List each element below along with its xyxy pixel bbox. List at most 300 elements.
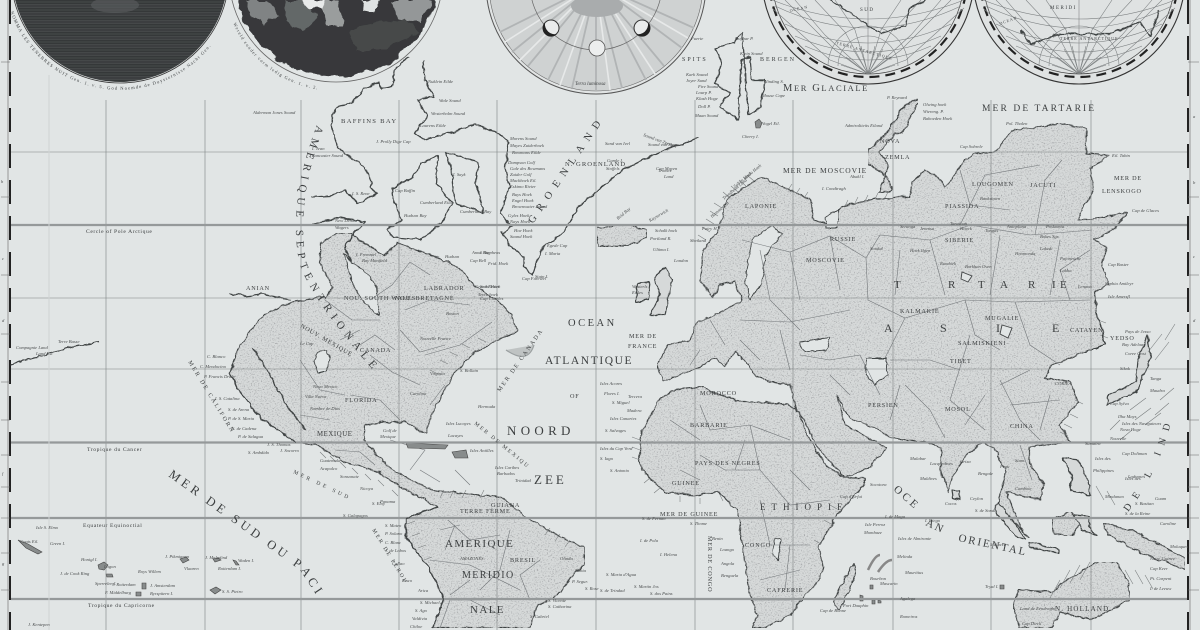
small place labels, north Atlantic and Arctic: Tromes (658, 168, 672, 173)
small place labels, north Atlantic and Arctic: Lancaster Sound (311, 153, 344, 158)
small place labels, north Atlantic and Arctic: Dampson Golf (507, 160, 536, 165)
continent and country names: CANADA (360, 347, 391, 354)
small place labels, Americas and Pacific: P. Segur. (571, 579, 588, 584)
small place labels, Americas and Pacific (16, 284, 599, 629)
small place labels, north Atlantic and Arctic: Nays Hoek (509, 219, 531, 224)
small place labels, north Atlantic and Arctic: Kark Sound (685, 72, 709, 77)
title: ocean and sea names: MER DE (629, 333, 657, 340)
title: ocean and sea names: BAFFINS BAY (341, 118, 397, 125)
title: ocean and sea names: MERIDIO (462, 570, 515, 581)
small place labels, north Atlantic and Arctic: Cap de Glaces (1132, 208, 1159, 213)
small place labels, Americas and Pacific: Roys Willem (137, 569, 162, 574)
continent and country names: CORIEA (1055, 381, 1072, 386)
small place labels, north Atlantic and Arctic: Hoeck (959, 226, 973, 231)
continent and country names: ANIAN (246, 285, 270, 292)
small place labels, Europe Asia and Africa: Bay Adelaar (1122, 342, 1145, 347)
title: ocean and sea names: MER DE CANADA (497, 331, 542, 392)
small place labels, Americas and Pacific: S. Bollain (460, 368, 479, 373)
title: ocean and sea names: NALE (470, 604, 505, 616)
title: ocean and sea names: AN (924, 517, 947, 536)
small place labels, north Atlantic and Arctic: Doll P. (697, 104, 711, 109)
continent and country names: MOSCOVIE (806, 257, 845, 264)
small place labels, Europe Asia and Africa: I. de Pola (639, 538, 659, 543)
small place labels, Europe Asia and Africa: Orixa (960, 459, 971, 464)
small place labels, north Atlantic and Arctic: Joyer Sund (686, 78, 707, 83)
right frame with degree scale (1188, 0, 1199, 630)
small place labels, Americas and Pacific: Lucayes (447, 433, 463, 438)
small place labels, Americas and Pacific: Terre Basse (58, 339, 79, 344)
left frame with degree scale: g (2, 561, 5, 566)
small place labels, north Atlantic and Arctic: Saand Hoek (510, 234, 533, 239)
small place labels, Europe Asia and Africa: Tercera (628, 394, 643, 399)
small place labels, Americas and Pacific: Le Cap (299, 341, 314, 346)
small place labels, Europe Asia and Africa: Pays de Jesso (1124, 329, 1151, 334)
small place labels, Americas and Pacific: Isle S. Elmo (35, 525, 59, 530)
small place labels, Europe Asia and Africa: Portland R. (649, 236, 671, 241)
small place labels, Europe Asia and Africa: Hammerfest (709, 200, 730, 219)
small place labels, Americas and Pacific: Isles Caribes (494, 465, 519, 470)
small place labels, north Atlantic and Arctic: Sound van Sluys (648, 142, 678, 147)
small place labels, Europe Asia and Africa: Isles Canaries (609, 416, 637, 421)
small place labels, Europe Asia and Africa: Sumatra (1085, 441, 1101, 446)
small place labels, Europe Asia and Africa: Trondheim Land (721, 177, 748, 201)
small place labels, Americas and Pacific: Nouvelle France (419, 336, 451, 341)
small place labels, north Atlantic and Arctic: Bokes Sgs (1040, 234, 1059, 239)
continent and country names: JACUTI (1030, 182, 1056, 189)
small place labels, north Atlantic and Arctic: Stoffels (606, 166, 620, 171)
continent and country names: LABRADOR (424, 285, 465, 292)
title: ocean and sea names: ORIENTAL (957, 532, 1028, 559)
small place labels, Europe Asia and Africa: Salten Hoek (732, 170, 753, 189)
small place labels, north Atlantic and Arctic: Cumberland Eilde (420, 200, 454, 205)
continent and country names: R (948, 279, 956, 291)
small place labels, Americas and Pacific: S. Ago (415, 608, 428, 613)
continent and country names: A (1000, 279, 1008, 291)
small place labels, Europe Asia and Africa: Isles Acores (599, 381, 622, 386)
continent and country names: KALMAKIE (900, 308, 939, 315)
continent and country names: SPITS (682, 57, 708, 63)
panel: west hemisphere globe: TERRE ANTARCTIQUE (836, 40, 893, 61)
small place labels, Americas and Pacific: S. de Cadena (232, 426, 257, 431)
panel: west hemisphere globe: SUD (860, 8, 875, 13)
small place labels, Europe Asia and Africa: S. Salvages (605, 428, 626, 433)
small place labels, north Atlantic and Arctic: Cumberland Bay (460, 209, 492, 214)
small place labels, Americas and Pacific: S. de Arena (228, 407, 250, 412)
title: ocean and sea names: ATLANTIQUE (545, 355, 633, 367)
small place labels, north Atlantic and Arctic: Duybar P. (734, 36, 754, 41)
title: ocean and sea names: N. HOLLAND (1055, 605, 1109, 613)
title: ocean and sea names: OCEAN (568, 318, 617, 329)
continent and country names: SALMISKIENI (958, 340, 1006, 347)
small place labels, Europe Asia and Africa: Isles du Cap Verd (599, 446, 633, 451)
small place labels, Europe Asia and Africa: Malacca (989, 542, 1007, 547)
small place labels, Europe Asia and Africa: I. Diego (924, 518, 941, 523)
small place labels, Europe Asia and Africa: Pt. Carpent (1149, 576, 1172, 581)
small place labels, Europe Asia and Africa: Mauritius (904, 570, 923, 575)
small place labels, Americas and Pacific: Bahia (575, 568, 587, 573)
continent and country names: ETHIOPIE (760, 502, 848, 512)
small place labels, north Atlantic and Arctic: Isle Amersfl (1107, 294, 1131, 299)
small place labels, north Atlantic and Arctic: Laurens Eilde (419, 123, 446, 128)
small place labels, north Atlantic and Arctic: Anna Bay (471, 250, 491, 255)
small place labels, north Atlantic and Arctic: Vinding S. (765, 79, 784, 84)
panel: east hemisphere globe: OCEAN (999, 15, 1018, 26)
small place labels, Americas and Pacific: Terra hoek (478, 292, 499, 297)
small place labels, Americas and Pacific: Callao (392, 561, 405, 566)
right frame with degree scale: a (1193, 114, 1196, 119)
small place labels, Europe Asia and Africa: Tryal I. (985, 584, 999, 589)
small place labels, Europe Asia and Africa: Mombaze (863, 530, 882, 535)
small place labels, Europe Asia and Africa: Caroline (1160, 521, 1176, 526)
small place labels, north Atlantic and Arctic: Cap Bell (470, 258, 487, 263)
small place labels, north Atlantic and Arctic: Mouse Cape (761, 93, 785, 98)
title: ocean and sea names: N. GROENLAND (565, 161, 626, 168)
small place labels, Americas and Pacific: Valdivia (412, 616, 428, 621)
continent and country names: T (894, 279, 901, 291)
small place labels, Europe Asia and Africa: Cap Doliman (1122, 451, 1148, 456)
small place labels, Europe Asia and Africa: Socotora (870, 482, 887, 487)
small place labels, Americas and Pacific: Barbados (497, 471, 515, 476)
panel: east hemisphere globe: TERRE ANTARCTIQUE (1060, 36, 1119, 41)
small place labels, Americas and Pacific: Waden I. (238, 558, 254, 563)
small place labels, north Atlantic and Arctic: I. Fremmel (355, 252, 377, 257)
panel: east hemisphere globe: MERIDI (1050, 6, 1077, 11)
continent and country names: MOROCCO (700, 390, 737, 397)
title: ocean and sea names: MER DE (1114, 175, 1142, 182)
continent and country names: RUSSIE (830, 236, 856, 243)
small place labels, north Atlantic and Arctic: Mayes Zuiderhoek (509, 143, 545, 148)
small place labels, Europe Asia and Africa: Vardo Hoek (742, 162, 763, 181)
continent and country names: LAPONIE (745, 203, 777, 210)
small place labels, Americas and Pacific: Compagnie Land (16, 345, 48, 350)
small place labels, Europe Asia and Africa: Angola (720, 561, 735, 566)
small place labels, north Atlantic and Arctic: J. Prolly Dige Cap (376, 139, 411, 144)
small place labels, Europe Asia and Africa (599, 162, 1188, 626)
continent and country names: AMAZONES (459, 556, 484, 561)
small place labels, Americas and Pacific: J. Maladind (205, 555, 228, 560)
small place labels, north Atlantic and Arctic: Abakl I. (849, 174, 865, 179)
small place labels, Europe Asia and Africa: Lacquedives (929, 461, 953, 466)
small place labels, Europe Asia and Africa: Philippines (1092, 468, 1114, 473)
small place labels, Europe Asia and Africa: S. Miguel (612, 400, 630, 405)
small place labels, Americas and Pacific: Pisco (401, 578, 413, 583)
title: ocean and sea names: MER DE TARTARIE (982, 104, 1096, 114)
small place labels, north Atlantic and Arctic: Seranga (900, 224, 916, 229)
small place labels, north Atlantic and Arctic: Tarascan (950, 221, 968, 226)
small place labels, Europe Asia and Africa: Madera (626, 408, 642, 413)
small place labels, north Atlantic and Arctic: Hudson Bay (403, 213, 428, 218)
left frame with degree scale (1, 0, 10, 630)
title: ocean and sea names: Tropique du Capricorne (88, 603, 155, 609)
small place labels, Europe Asia and Africa: Romeiros (899, 614, 918, 619)
small place labels, Americas and Pacific: S. Vicente (548, 598, 566, 603)
small place labels, north Atlantic and Arctic: Cap Mayen (656, 166, 678, 171)
small place labels, north Atlantic and Arctic: Bay Manfield (362, 258, 388, 263)
small place labels, Americas and Pacific: Trinidad (515, 478, 532, 483)
continent and country names: NOVA (880, 138, 900, 145)
small place labels, north Atlantic and Arctic: Hudson (444, 254, 460, 259)
small place labels, Americas and Pacific: Coats Eil. (20, 539, 38, 544)
small place labels, Americas and Pacific: J. Pikmignon (165, 554, 190, 559)
small place labels, north Atlantic and Arctic: Land (663, 174, 674, 179)
small place labels, north Atlantic and Arctic: Brownwater Sound (512, 204, 548, 209)
title: ocean and sea names: MER DE GUINEE (660, 511, 718, 518)
title: ocean and sea names: MER GLACIALE (783, 83, 869, 94)
small place labels, Americas and Pacific: P. de Salagua (237, 434, 264, 439)
small place labels, Europe Asia and Africa: Fort Dauphin (842, 603, 869, 608)
small place labels, Europe Asia and Africa: Agalega (899, 596, 916, 601)
small place labels, Americas and Pacific: I. S. Catalina (214, 396, 240, 401)
small place labels, Europe Asia and Africa: S. Iago (600, 456, 614, 461)
title: ocean and sea names: Tropique du Cancer (87, 447, 142, 453)
small place labels, Europe Asia and Africa: Guam (1155, 496, 1167, 501)
continent and country names: S (940, 321, 947, 335)
continent and country names: TERRE FERME (460, 508, 511, 515)
small place labels, Americas and Pacific: Cap Charles (480, 296, 504, 301)
small place labels, Americas and Pacific: C. Blanc (385, 540, 401, 545)
small place labels, Europe Asia and Africa: Nouvelle (1109, 436, 1126, 441)
title: ocean and sea names: LENSKOGO (1102, 188, 1142, 195)
small place labels, Europe Asia and Africa: Sikok (1120, 366, 1131, 371)
small place labels, Americas and Pacific: J. Amsterdam (150, 583, 176, 588)
small place labels, Europe Asia and Africa: I. de Leeuw (1149, 586, 1172, 591)
small place labels, Europe Asia and Africa: Nouv. Guinee (1149, 556, 1175, 561)
small place labels, Europe Asia and Africa: Isles des (1124, 476, 1141, 481)
small place labels, Europe Asia and Africa: Maudra (1149, 388, 1166, 393)
continent and country names: NOUV. MEXIQUE (299, 323, 354, 358)
title: ocean and sea names: ZEE (534, 472, 567, 487)
continent and country names: PAYS DES NEGRES (695, 460, 761, 467)
land masses: Greenland and Spitsbergen coast (415, 32, 765, 275)
small place labels, north Atlantic and Arctic: Hoomonda (1014, 251, 1036, 256)
title: ocean and sea names: MER DE SUD (293, 470, 348, 498)
small place labels, Europe Asia and Africa: Isles des Navigateurs (1121, 421, 1162, 426)
title: ocean and sea names: MER DE CALIFORNIE (188, 360, 234, 432)
continent and country names: LOUGOMEN (972, 181, 1014, 188)
small place labels, north Atlantic and Arctic: Sound van Zeeman (643, 132, 678, 149)
small place labels, Americas and Pacific: J. de Lobos (385, 548, 406, 553)
small place labels, Europe Asia and Africa: I. Helena (659, 552, 678, 557)
small place labels, Americas and Pacific: S. Catharina (548, 604, 572, 609)
small place labels, north Atlantic and Arctic: Egede Cap (546, 243, 568, 248)
small place labels, Americas and Pacific: Grand Rivier (475, 284, 500, 289)
small place labels, north Atlantic and Arctic: Lakha (1059, 268, 1072, 273)
continent and country names: CATAYEN (1070, 327, 1103, 334)
small place labels, Americas and Pacific: S. S. Pietro (222, 589, 243, 594)
small place labels, Europe Asia and Africa: Cocos (945, 501, 957, 506)
small place labels, Americas and Pacific: S. Michael (420, 600, 440, 605)
panel: east hemisphere globe (973, 0, 1185, 84)
small place labels, Americas and Pacific: S. Gabriel (530, 614, 550, 619)
small place labels, north Atlantic and Arctic: Gale des Bowmans (510, 166, 545, 171)
small place labels, Americas and Pacific: J. de Cook Ring (60, 571, 90, 576)
small place labels, Europe Asia and Africa: Cap Dirck (1022, 621, 1042, 626)
continent and country names: MUGALIE (985, 315, 1019, 322)
small place labels, Americas and Pacific: Honigl I. (80, 557, 98, 562)
small place labels, north Atlantic and Arctic: Admiraliteits Eiland (844, 123, 883, 128)
small place labels, north Atlantic and Arctic: Sophia Amileyr (1105, 281, 1134, 286)
small place labels, Europe Asia and Africa: Pegu (999, 464, 1010, 469)
small place labels, north Atlantic and Arctic: Alderman Jones Sound (252, 110, 296, 115)
small place labels, north Atlantic and Arctic: Hoek Ilgen (909, 248, 931, 253)
small place labels, north Atlantic and Arctic: Cap Sobrele (960, 144, 983, 149)
small place labels, north Atlantic and Arctic: Tongas (985, 228, 998, 233)
continent and country names: CAFRERIE (767, 587, 803, 594)
small place labels, north Atlantic and Arctic: Frid. Hoek (487, 261, 509, 266)
small place labels, Europe Asia and Africa: Eisles (631, 290, 643, 295)
title: ocean and sea names: Cercle of Pole Arctique (86, 228, 152, 235)
small place labels, north Atlantic and Arctic: I. S. Rene (351, 191, 370, 196)
title: ocean and sea names: MER DE SUD OU PACI (168, 470, 323, 594)
land masses: the Americas (10, 57, 585, 628)
small place labels, north Atlantic and Arctic: I. Maria (544, 251, 561, 256)
small place labels, Americas and Pacific: Arica (417, 588, 429, 593)
small place labels, north Atlantic and Arctic: Saint Hoek (480, 284, 501, 289)
small place labels, north Atlantic and Arctic: Mackhoek Eil. (509, 178, 537, 183)
title: ocean and sea names: NOORD (507, 423, 575, 438)
title: ocean and sea names: Equateur Equinoctial (83, 523, 142, 529)
panel: moon phases disc (486, 0, 706, 94)
small place labels, Europe Asia and Africa: S. de Trindad (600, 588, 625, 593)
small place labels, Americas and Pacific: P. Francis Drake (203, 374, 235, 379)
small place labels, Americas and Pacific: Mexique (379, 434, 396, 439)
small place labels, Europe Asia and Africa: S. de la Reine (1125, 511, 1150, 516)
small place labels, Americas and Pacific: Nombre de Dios (309, 406, 340, 411)
small place labels, Europe Asia and Africa: Kayserwick (647, 207, 670, 223)
continent and country names: I (1052, 279, 1056, 291)
panel: dark disc, darkness: NOMMA LES TENEBRES NUIT Gen. 1. v. 5. God Noemde de Duysternisse Nacht Gen. (10, 11, 210, 90)
continent and country names: GUINEE (672, 480, 700, 487)
small place labels, Europe Asia and Africa: Shetland (690, 238, 707, 243)
small place labels, Europe Asia and Africa: Schalk hock (655, 228, 678, 233)
small place labels, north Atlantic and Arctic: Cap Baffin (395, 188, 416, 193)
continent and country names: YEDSO (1110, 335, 1135, 342)
overlay: east and west coast strokes (230, 315, 1105, 628)
continent and country names (246, 57, 1135, 594)
small place labels, north Atlantic and Arctic: Antoplana (1006, 224, 1027, 229)
continent and country names: FLORIDA (345, 397, 377, 404)
small place labels, north Atlantic and Arctic: Wale Sound (439, 98, 461, 103)
small place labels, Americas and Pacific: Boston (446, 311, 459, 316)
panel: west hemisphere globe: OCEAN (789, 4, 809, 13)
small place labels, north Atlantic and Arctic: Zuider Golf (510, 172, 532, 177)
panel: west hemisphere globe (762, 0, 974, 84)
title: ocean and sea names: FRANCE (628, 343, 657, 350)
continent and country names: NOU. BRETAGNE (395, 295, 454, 302)
small place labels, north Atlantic and Arctic: Lourp P. (695, 90, 712, 95)
small place labels, Americas and Pacific: Olinda (560, 556, 573, 561)
small place labels, Europe Asia and Africa: Siam (1015, 458, 1025, 463)
small place labels, Americas and Pacific: Hermuda (477, 404, 496, 409)
small place labels, north Atlantic and Arctic: Rundoek (939, 261, 957, 266)
small place labels, Europe Asia and Africa: Tanga (1150, 376, 1162, 381)
small place labels, Americas and Pacific: Virginia (430, 371, 446, 376)
small place labels, Americas and Pacific: Vlaaren (184, 566, 199, 571)
title: ocean and sea names: AMERIQUE SEPTENTRIONALE (296, 125, 377, 369)
continent and country names: NOU. SOUTH WALES (344, 295, 416, 302)
small place labels, Americas and Pacific: Isles Antilles (469, 448, 494, 453)
right frame with degree scale: d (1193, 318, 1196, 323)
small place labels, north Atlantic and Arctic: Morens Sound (509, 136, 537, 141)
small place labels, Europe Asia and Africa: Maldives (919, 476, 937, 481)
small place labels, north Atlantic and Arctic: Klein Sound (739, 51, 763, 56)
small place labels, Americas and Pacific: Acapulco (319, 466, 338, 471)
title: ocean and sea names: MER DE PEROU (372, 528, 408, 582)
small place labels, Americas and Pacific: S. Ambdido (248, 450, 270, 455)
small place labels, Europe Asia and Africa: Nova Hoge (1119, 427, 1141, 432)
small place labels, Europe Asia and Africa: Ultima I. (653, 247, 670, 252)
small place labels, Americas and Pacific: S. Galapagos (343, 513, 368, 518)
small place labels, Europe Asia and Africa: Fairy H. (701, 226, 718, 231)
continent and country names: A (884, 321, 893, 335)
small place labels, north Atlantic and Arctic: Eil. Tabin (1111, 153, 1131, 158)
small place labels, Europe Asia and Africa: Camboie (1015, 486, 1032, 491)
small place labels, Europe Asia and Africa: Coree Oost (1125, 351, 1147, 356)
small place labels, Americas and Pacific: C. Mendocino (200, 364, 227, 369)
small place labels, Americas and Pacific: J. S. Thomas (267, 442, 291, 447)
small place labels, north Atlantic and Arctic (252, 36, 1159, 299)
continent and country names: CHINA (1010, 423, 1034, 430)
small place labels, north Atlantic and Arctic: Fire Sound (697, 84, 719, 89)
small place labels, Americas and Pacific: C. Blanco (207, 354, 226, 359)
continent and country names: PIASSIDA (945, 203, 979, 210)
small place labels, north Atlantic and Arctic: Westerholm Sound (431, 111, 466, 116)
land masses: Africa and Madagascar (632, 386, 866, 628)
small place labels, Americas and Pacific: S. Mateo (385, 523, 402, 528)
small place labels, Europe Asia and Africa: S. Maria d'Agua (606, 572, 637, 577)
continent and country names: ZEMLA (885, 154, 910, 161)
small place labels, Americas and Pacific: Rotterdam I. (217, 566, 241, 571)
small place labels, Europe Asia and Africa: Westerls (632, 284, 648, 289)
small place labels, Americas and Pacific: Villa Nueva (305, 394, 327, 399)
small place labels, Americas and Pacific: J. Kentepen (28, 622, 50, 627)
small place labels, north Atlantic and Arctic: Wiereng. P. (923, 109, 944, 114)
small place labels, Europe Asia and Africa: S. Antonio (610, 468, 630, 473)
small place labels, Europe Asia and Africa: S. Thome (690, 521, 707, 526)
small place labels, Europe Asia and Africa: Cap Keer (1150, 566, 1168, 571)
small place labels, Americas and Pacific: Isles Lucayes (445, 421, 471, 426)
small place labels, Americas and Pacific: Chiloe (410, 624, 422, 629)
title: ocean and sea names: MEXIQUE (317, 431, 353, 438)
continent and country names: I (996, 321, 1000, 335)
continent and country names: E (1052, 321, 1059, 335)
small place labels, Americas and Pacific: Sonsonate (340, 474, 359, 479)
small place labels, north Atlantic and Arctic: Hoe Hoek (513, 228, 533, 233)
small place labels, north Atlantic and Arctic: Olwing hoek (923, 102, 947, 107)
small place labels, north Atlantic and Arctic: Cap Farewel (522, 276, 547, 281)
small place labels, Americas and Pacific: Lagon (103, 564, 116, 569)
title: ocean and sea names: MER DE MEXIQUE (474, 421, 529, 466)
small place labels, Europe Asia and Africa: Isles de Almirante (897, 536, 931, 541)
small place labels, Americas and Pacific: J. Socorro (280, 448, 300, 453)
continent and country names: SIBERIE (945, 237, 974, 244)
left frame with degree scale: d (2, 318, 5, 323)
small place labels, north Atlantic and Arctic: Engel Hoek (511, 198, 535, 203)
small place labels, Americas and Pacific: P. de S. Maria (227, 416, 255, 421)
small place labels, north Atlantic and Arctic: Gyles Hoek (508, 213, 530, 218)
small place labels, Americas and Pacific: Nicoya (359, 486, 374, 491)
small place labels, Americas and Pacific: S. Eloy (372, 501, 386, 506)
continent and country names: BERGEN (760, 57, 796, 63)
small place labels, north Atlantic and Arctic: Eskimo Rivier (509, 184, 536, 189)
small place labels, Europe Asia and Africa: Isles des (1094, 456, 1111, 461)
continent and country names: BARBARIE (690, 422, 728, 429)
continent and country names: CONGO (745, 542, 771, 549)
small place labels, Europe Asia and Africa: Benin (712, 536, 723, 541)
small place labels, Europe Asia and Africa: Cap de Bonne (820, 608, 846, 613)
small place labels, Americas and Pacific: J. Rotterdam (112, 582, 136, 587)
small place labels, Europe Asia and Africa: Flores I. (603, 391, 620, 396)
